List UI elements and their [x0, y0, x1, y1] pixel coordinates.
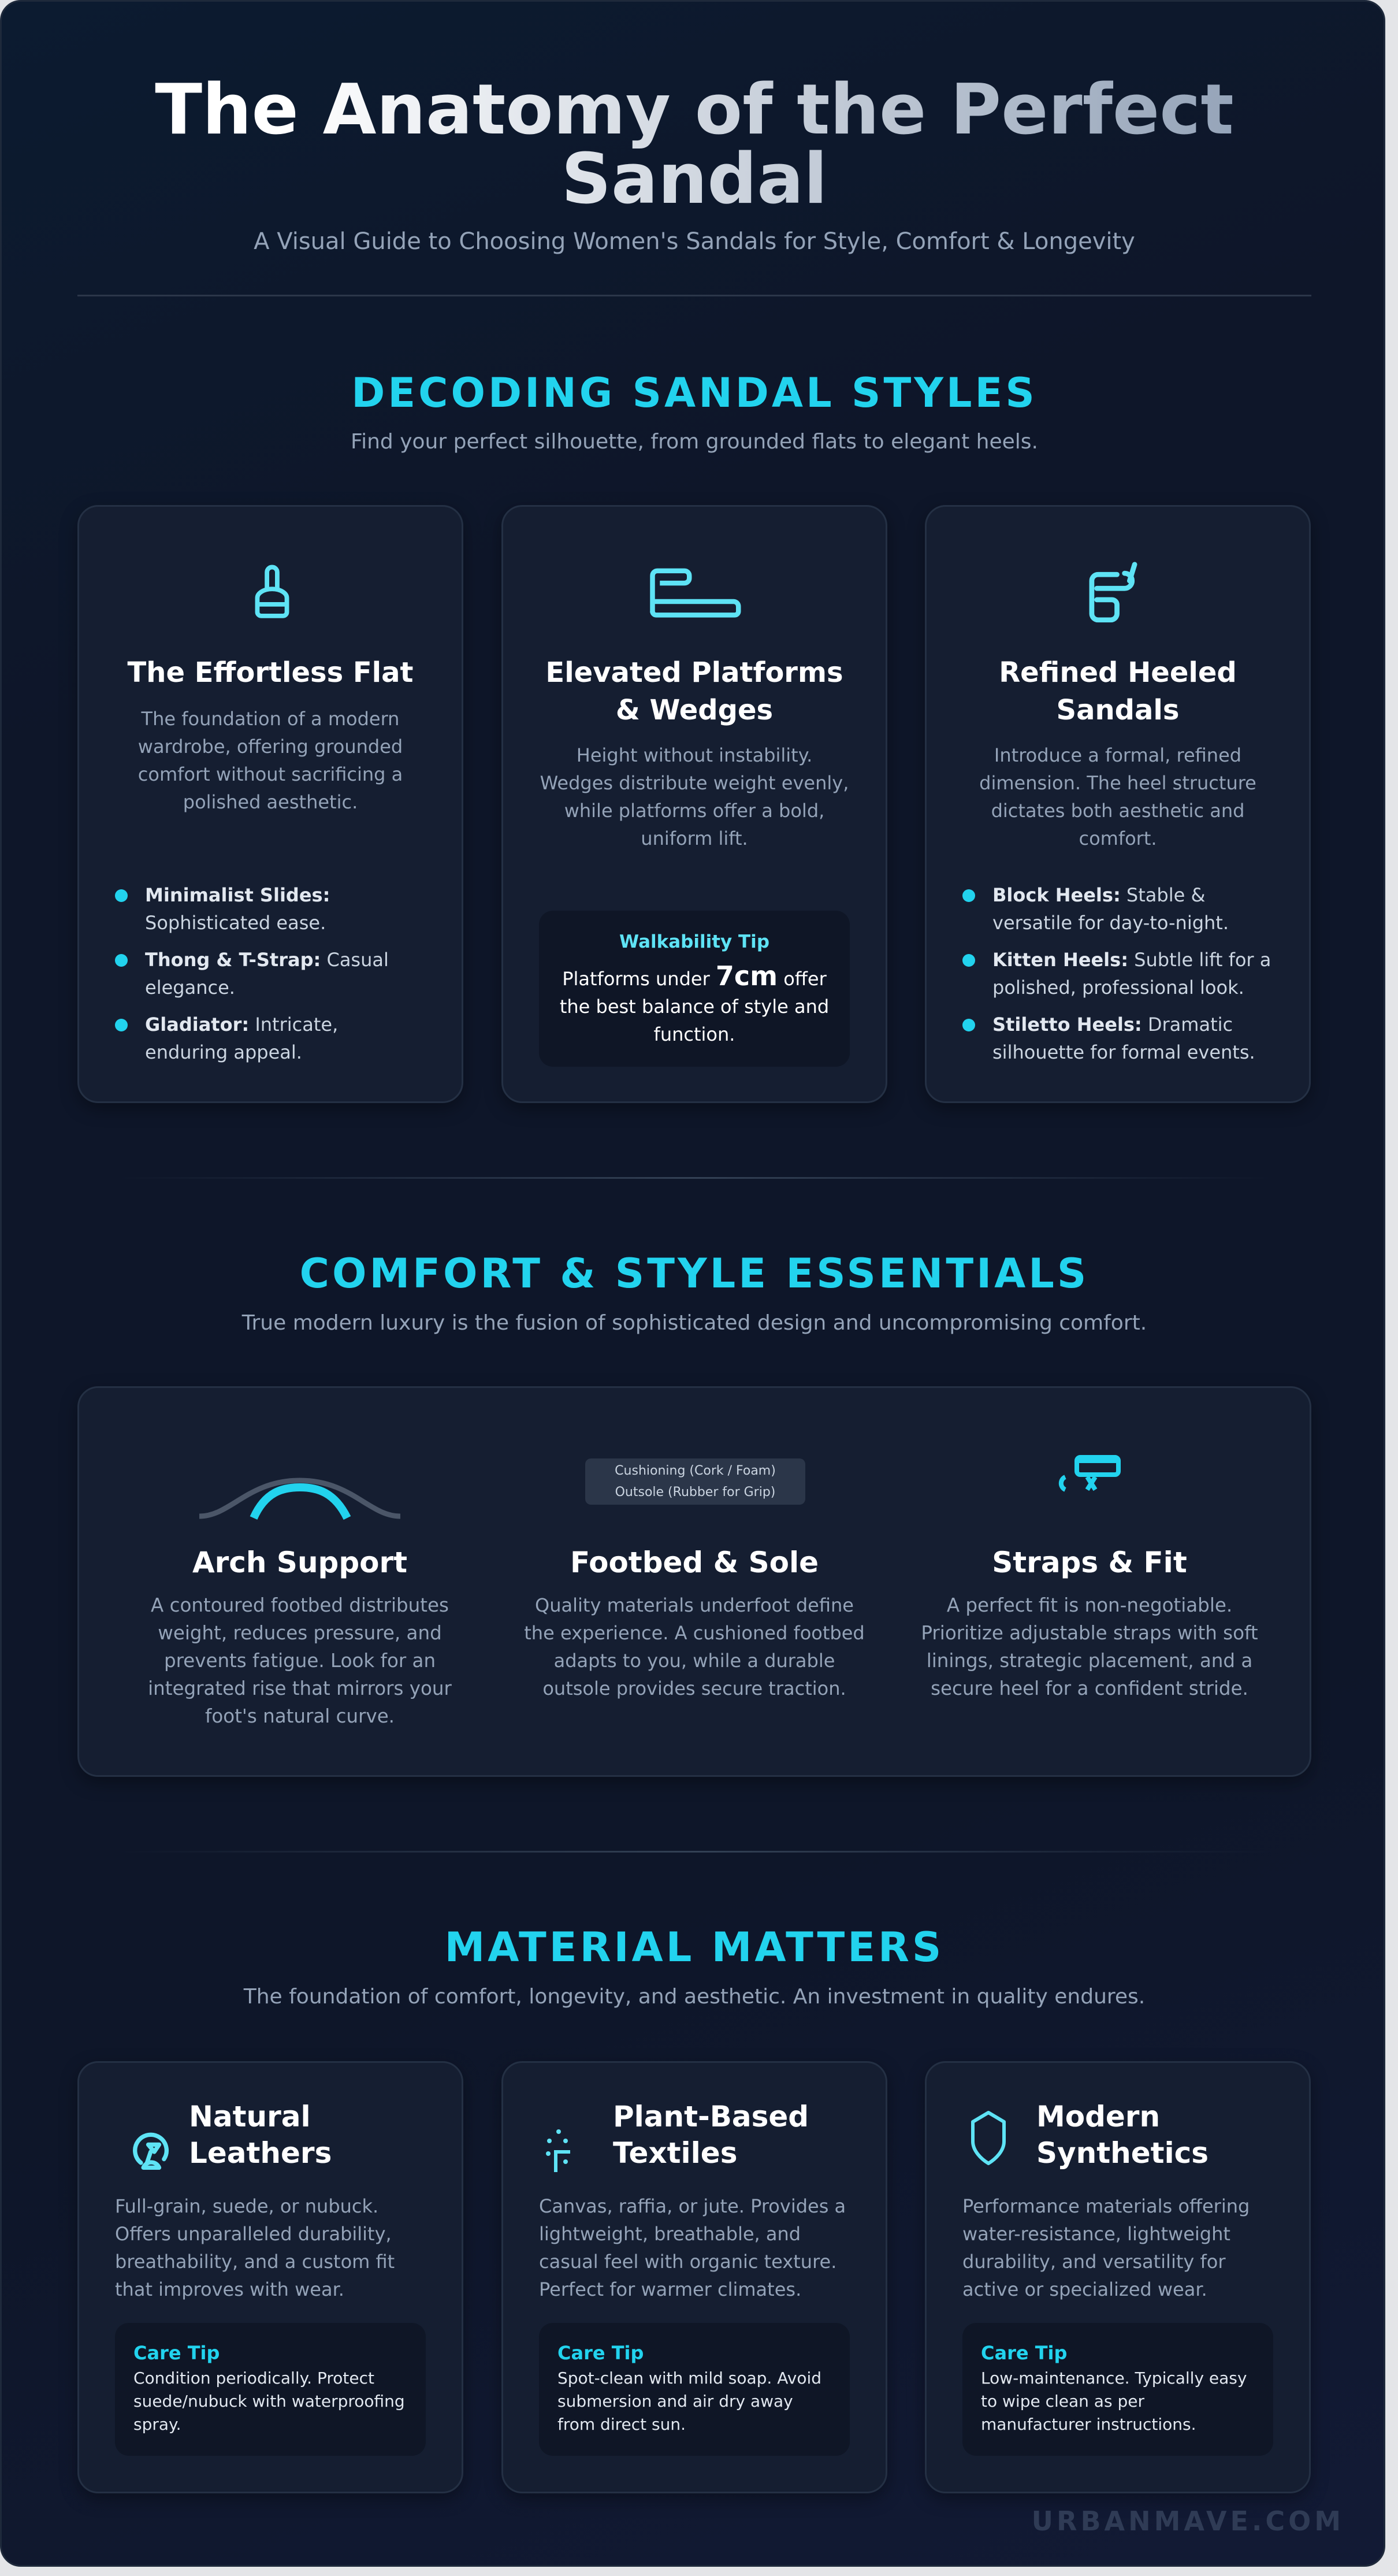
title: Leathers — [189, 2136, 332, 2170]
bullet list: Gladiator: Intricate, enduring appeal. — [145, 1014, 338, 1063]
card description: The foundation of a modern wardrobe, offering grounded comfort without sacrificing a polished aesthetic. — [138, 708, 403, 813]
icon: leather — [133, 2132, 169, 2170]
title: Straps & Fit — [992, 1546, 1187, 1579]
heading: material matters: MATERIAL MATTERS — [445, 1924, 944, 1971]
description: Quality materials underfoot define — [535, 1594, 854, 1616]
subheading: True modern luxury is the fusion of sophisticated design and uncompromising comfort. — [242, 1311, 1147, 1335]
card title — [999, 656, 1237, 726]
care tip: Spot-clean with mild soap. Avoid submersion and air dry away from direct sun. — [557, 2369, 821, 2434]
column: footbed & sole — [524, 1458, 865, 1699]
subheading: Find your perfect silhouette, from grounded flats to elegant heels. — [351, 430, 1038, 454]
bullet list: Block Heels: Stable & versatile for day-to-night. — [992, 884, 1229, 934]
description: A contoured footbed distributes weight, reduces pressure, and prevents fatigue. Look for an integrated rise that mirrors your foot's natural curve. — [148, 1594, 452, 1727]
title: Modern — [1036, 2100, 1160, 2133]
card description: Introduce a formal, refined dimension. The heel structure dictates both aesthetic and comfort. — [979, 744, 1256, 849]
title — [613, 2100, 809, 2170]
title: Sandal — [562, 139, 827, 220]
icon: textile — [546, 2129, 570, 2172]
care tip: Care Tip — [133, 2342, 220, 2364]
icon: flat sandal — [255, 565, 289, 618]
title: Footbed & Sole — [570, 1546, 819, 1579]
description: Canvas, raffia, or jute. Provides a lightweight, breathable, and casual feel with organic texture. Perfect for warmer climates. — [539, 2195, 846, 2300]
care tip: Condition periodically. Protect suede/nubuck with waterproofing spray. — [133, 2369, 405, 2434]
care tip — [962, 2323, 1273, 2456]
heading: decoding sandal styles: DECODING SANDAL STYLES — [351, 369, 1038, 417]
bullet list: Minimalist Slides: Sophisticated ease. — [145, 884, 330, 934]
card: plant-based textiles — [501, 2061, 887, 2493]
walkability tip: Walkability Tip — [619, 931, 769, 952]
bullet list: Thong & T-Strap: Casual elegance. — [145, 949, 389, 999]
card title — [545, 656, 843, 726]
description: Performance materials offering water-resistance, lightweight durability, and versatility for active or specialized wear. — [962, 2195, 1250, 2300]
description: Full-grain, suede, or nubuck. Offers unparalleled durability, breathability, and a custom fit that improves with wear. — [115, 2195, 395, 2300]
card title: Elevated Platforms — [545, 656, 843, 689]
card: modern synthetics — [925, 2061, 1311, 2493]
bullet list — [115, 884, 389, 1063]
title: Synthetics — [1036, 2136, 1209, 2170]
icon: heel — [1090, 562, 1137, 623]
card title: Sandals — [1057, 694, 1179, 726]
walkability tip — [539, 911, 850, 1067]
card description: Height without instability. — [577, 744, 812, 766]
care tip: Care Tip — [557, 2342, 644, 2364]
card description: uniform lift. — [641, 827, 748, 849]
title — [2, 76, 1387, 214]
card: heeled — [925, 505, 1311, 1103]
bullet list: Stiletto Heels: Dramatic silhouette for formal events. — [992, 1014, 1255, 1063]
card title: Refined Heeled — [999, 656, 1237, 689]
title: The Anatomy of the Perfect — [155, 70, 1234, 150]
column: arch support — [148, 1478, 452, 1727]
title — [1036, 2100, 1209, 2170]
card: platforms — [501, 505, 887, 1103]
card title: The Effortless Flat — [128, 656, 413, 689]
subheading: The foundation of comfort, longevity, and aesthetic. An investment in quality endures. — [244, 1985, 1145, 2009]
description: outsole provides secure traction. — [542, 1677, 846, 1699]
card description: while platforms offer a bold, — [564, 800, 824, 822]
watermark: URBANMAVE.COM — [1032, 2506, 1344, 2537]
heading: comfort & style essentials: COMFORT & STYLE ESSENTIALS — [300, 1250, 1089, 1297]
care tip: Care Tip — [981, 2342, 1067, 2364]
title: Plant-Based — [613, 2100, 809, 2133]
column: straps & fit — [921, 1455, 1258, 1699]
title — [189, 2100, 332, 2170]
title: Natural — [189, 2100, 311, 2133]
card description — [540, 744, 849, 849]
label box: Outsole (Rubber for Grip) — [615, 1485, 775, 1499]
description: the experience. A cushioned footbed — [524, 1622, 865, 1644]
panel: essentials — [77, 1386, 1311, 1777]
icon: shield — [971, 2111, 1006, 2165]
icon: platform — [650, 569, 741, 618]
card title: & Wedges — [616, 694, 773, 726]
description: adapts to you, while a durable — [554, 1650, 835, 1672]
label box: Cushioning (Cork / Foam) — [615, 1464, 776, 1478]
bullet list: Kitten Heels: Subtle lift for a polished, professional look. — [992, 949, 1271, 999]
walkability tip: Platforms under 7cm offer the best balance of style and function. — [560, 960, 829, 1045]
icon: straps — [1058, 1455, 1121, 1492]
card description: Wedges distribute weight evenly, — [540, 772, 849, 794]
description: A perfect fit is non-negotiable. Prioritize adjustable straps with soft linings, strategic placement, and a secure heel for a confident stride. — [921, 1594, 1258, 1699]
subtitle: A Visual Guide to Choosing Women's Sandals for Style, Comfort & Longevity — [254, 228, 1135, 255]
title: Arch Support — [192, 1546, 407, 1579]
care tip: Low-maintenance. Typically easy to wipe clean as per manufacturer instructions. — [981, 2369, 1247, 2434]
care tip — [539, 2323, 850, 2456]
card: effortless flat — [77, 505, 463, 1103]
care tip — [115, 2323, 426, 2456]
title: Textiles — [613, 2136, 737, 2170]
label box — [585, 1458, 805, 1505]
icon: arch — [199, 1478, 400, 1520]
card: natural leathers — [77, 2061, 463, 2493]
description — [524, 1594, 865, 1699]
bullet list — [962, 884, 1271, 1063]
